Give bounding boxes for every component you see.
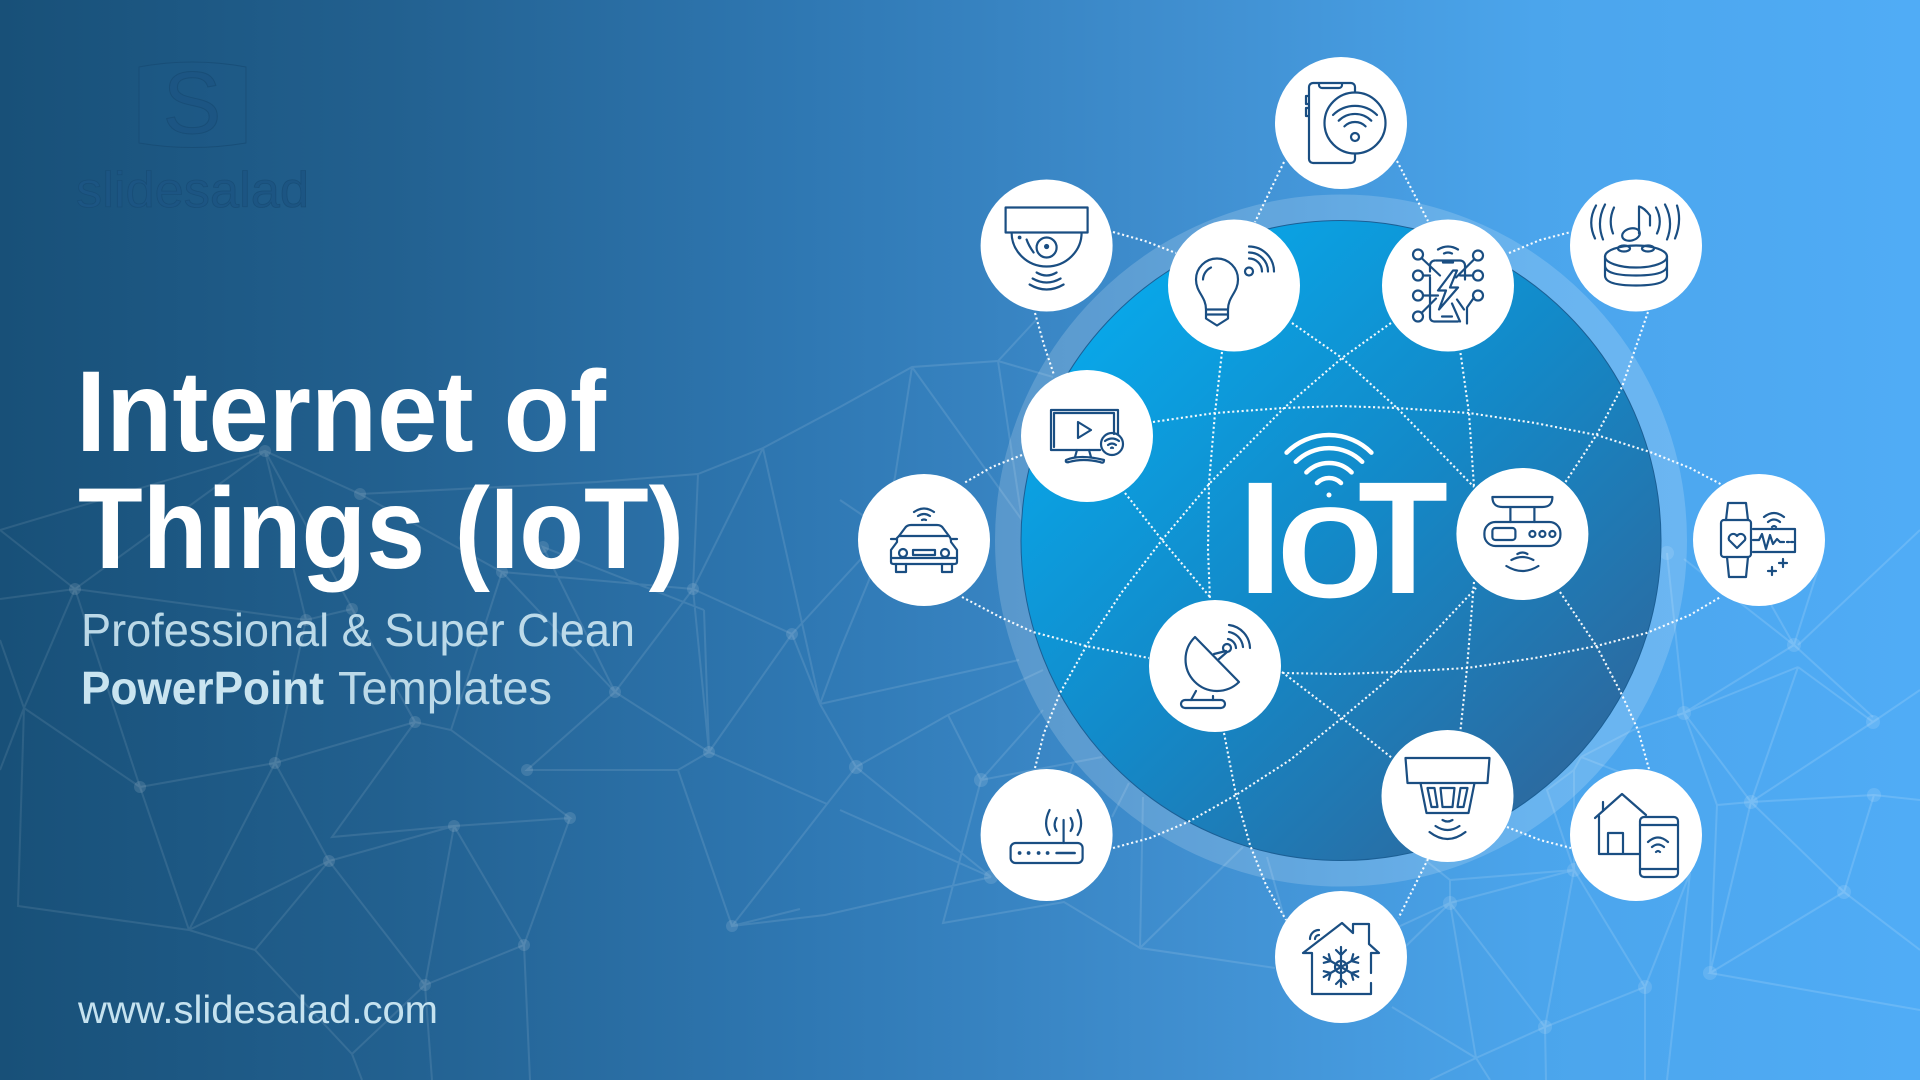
logo watermark: slidesalad xyxy=(76,162,309,218)
icon: smart light bulb xyxy=(1168,220,1300,352)
title: Internet of xyxy=(76,348,607,476)
icon: smoke detector xyxy=(1382,730,1514,862)
IoT wordmark xyxy=(1238,448,1448,629)
title xyxy=(76,348,684,593)
logo watermark xyxy=(76,53,309,218)
icon: smartphone wifi xyxy=(1275,57,1407,189)
icon: connected car xyxy=(858,474,990,606)
IoT wordmark: T xyxy=(1358,448,1448,627)
icon: wifi router xyxy=(981,769,1113,901)
icon: wifi above IoT xyxy=(1287,435,1371,498)
website url: www.slidesalad.com xyxy=(77,989,438,1032)
logo watermark: S xyxy=(163,53,221,152)
subtitle: PowerPoint xyxy=(81,662,324,714)
icon: security camera xyxy=(981,180,1113,312)
subtitle: Templates xyxy=(338,662,552,714)
IoT wordmark: o xyxy=(1277,450,1383,629)
icon: smart TV xyxy=(1021,370,1153,502)
icon: smart home phone xyxy=(1570,769,1702,901)
subtitle xyxy=(81,604,635,714)
icon: smart home climate xyxy=(1275,891,1407,1023)
icon: satellite dish xyxy=(1149,600,1281,732)
subtitle: Professional & Super Clean xyxy=(81,604,635,656)
globe xyxy=(1021,220,1661,860)
title: Things (IoT) xyxy=(78,465,684,593)
network mesh background xyxy=(0,320,1920,1080)
globe outer ring xyxy=(1008,208,1674,874)
icon: network module xyxy=(1456,468,1588,600)
icon: smartwatch health xyxy=(1693,474,1825,606)
icon: phone circuit xyxy=(1382,220,1514,352)
dotted connection lines xyxy=(962,161,1720,920)
icon: smart speaker xyxy=(1570,180,1702,312)
IoT wordmark: I xyxy=(1238,448,1282,627)
